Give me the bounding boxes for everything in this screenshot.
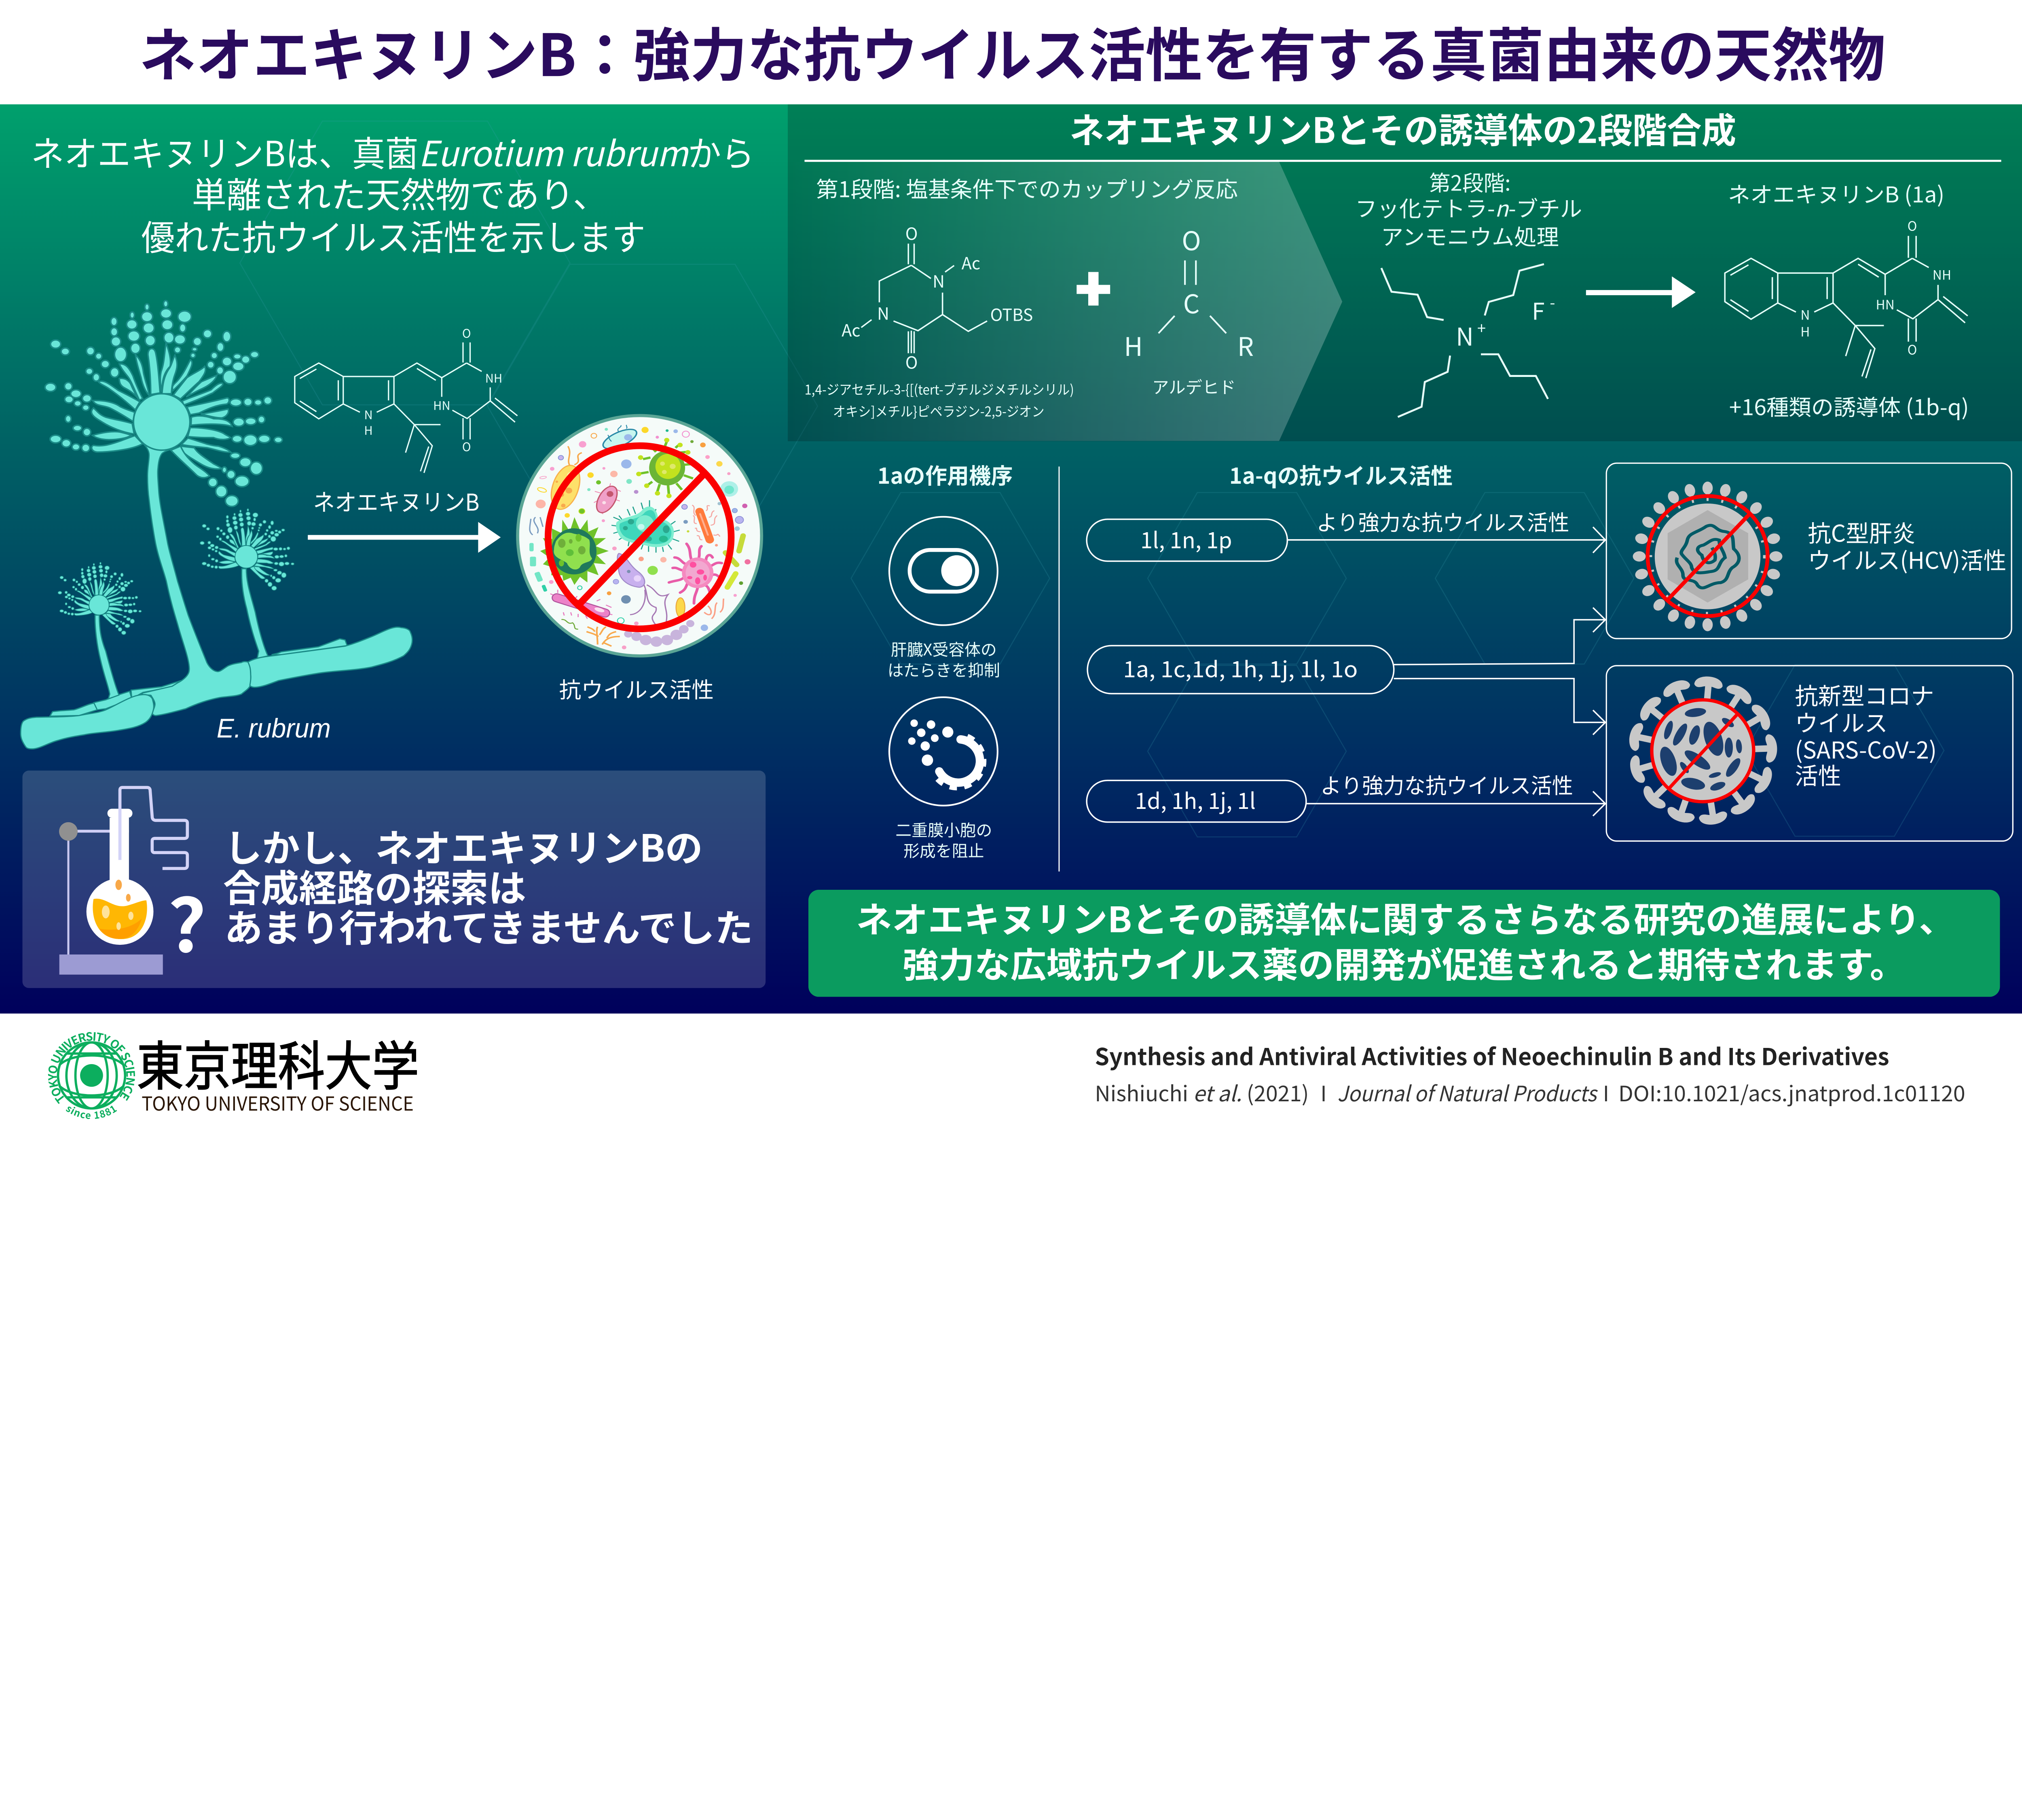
statement text (223, 818, 753, 952)
microbe: magenta rod (550, 590, 612, 619)
icon: coronavirus (1627, 675, 1778, 826)
panel: mechanism and antiviral activity (788, 441, 2022, 890)
microbe: purple bacillus (618, 554, 668, 625)
molecule: TBAF: + (1477, 317, 1486, 339)
molecule: piperazinedione (842, 220, 1033, 374)
molecule: neoechinulin B product: N (1801, 305, 1810, 324)
microbe: pink cell (592, 483, 621, 516)
plus sign (1077, 272, 1110, 306)
pill: 1l 1n 1p (1087, 519, 1288, 561)
citation (1095, 1038, 1965, 1108)
logo: university name: TOKYO UNIVERSITY OF SCIENCE (142, 1088, 414, 1116)
molecule: neoechinulin B product: O (1908, 216, 1917, 235)
icon: toggle receptor (889, 516, 998, 625)
molecule: aldehyde: H (1124, 326, 1143, 364)
derivatives label: +16種類の誘導体 (1b-q) (1729, 390, 1969, 422)
heading: mechanism: 1aの作用機序 (878, 458, 1013, 490)
illustration: microbes with prohibition sign (518, 416, 761, 656)
molecule: neoechinulin B product: O (1908, 340, 1917, 359)
intro text: ネオエキヌリンBは、真菌Eurotium rubrumから (31, 126, 754, 176)
label: DMV formation: 二重膜小胞の (896, 817, 992, 840)
label: anti-HCV: 抗C型肝炎 (1808, 514, 1916, 548)
label: DMV formation (896, 817, 992, 861)
icon: double-membrane vesicle gear (889, 697, 998, 805)
label: anti-HCV (1808, 514, 2007, 576)
label: LXR inhibition: 肝臓X受容体の (891, 637, 997, 660)
label: anti-SARS-CoV-2 (1795, 677, 1937, 791)
infographic canvas (0, 0, 2022, 1137)
label: anti-SARS-CoV-2: 活性 (1795, 757, 1842, 791)
icon: flask apparatus (59, 787, 187, 974)
panel: conclusion: 強力な広域抗ウイルス薬の開発が促進されると期待されます。 (903, 937, 1906, 988)
statement text: 合成経路の探索は (223, 858, 526, 912)
divider: mechanism / activity (1059, 466, 1060, 871)
step 2 label: フッ化テトラ-n-ブチル (1355, 191, 1582, 223)
microbe: teal germ (611, 500, 680, 553)
arrow: neoechinulin to activity (308, 522, 501, 553)
molecule: piperazinedione: N (933, 268, 945, 292)
molecule: neoechinulin B product (1725, 216, 1968, 378)
molecule: TBAF: - (1550, 291, 1555, 313)
molecule: TBAF: F (1532, 293, 1545, 327)
logo: university seal: since 1881 (64, 1101, 119, 1122)
background hexagon pattern (0, 104, 2022, 1014)
icon: HCV virus (1633, 481, 1783, 631)
intro text: 優れた抗ウイルス活性を示します (141, 210, 645, 260)
molecule: piperazinedione: OTBS (990, 302, 1033, 326)
label: LXR inhibition: はたらきを抑制 (888, 658, 1000, 681)
citation: I (1603, 1077, 1609, 1108)
pill: 1a group (1087, 645, 1394, 694)
molecule: neoechinulin B left: HN (433, 397, 451, 414)
molecule: neoechinulin B left: O (462, 438, 471, 455)
intro text (31, 126, 754, 260)
label: reagent name: オキシ]メチル}ピペラジン-2,5-ジオン (833, 401, 1045, 421)
citation: Journal of Natural Products (1337, 1077, 1598, 1108)
molecule: piperazinedione: O (905, 220, 918, 245)
arrow: pill 2 to HCV (1394, 607, 1605, 665)
molecule: piperazinedione: Ac (962, 250, 980, 274)
footer (0, 1014, 2022, 1137)
statement text: あまり行われてきませんでした (224, 898, 753, 952)
arrow: pill 3 to SARS-CoV-2: より強力な抗ウイルス活性 (1320, 769, 1573, 800)
arrow: pill 3 to SARS-CoV-2 (1306, 769, 1605, 816)
molecule: piperazinedione: N (877, 301, 889, 325)
pill: 1l 1n 1p: 1l, 1n, 1p (1140, 523, 1232, 554)
molecule: neoechinulin B left: NH (485, 369, 502, 386)
pill: 1a group: 1a, 1c,1d, 1h, 1j, 1l, 1o (1123, 652, 1358, 684)
product label: ネオエキヌリンB (1a) (1728, 177, 1945, 209)
molecule: TBAF: N (1456, 318, 1474, 353)
molecule: piperazinedione: O (905, 349, 918, 374)
panel: synthesis gap statement (0, 770, 788, 1014)
label: anti-SARS-CoV-2: ウイルス (1795, 704, 1888, 738)
microbe: small organisms (529, 459, 743, 629)
microbe: spiky green (540, 517, 609, 585)
microbe: orange rod (692, 505, 720, 540)
microbe: green virus (636, 438, 693, 498)
title bar: ネオエキヌリンB：強力な抗ウイルス活性を有する真菌由来の天然物 (139, 9, 1885, 93)
label: reagent name (805, 379, 1074, 421)
panel: conclusion: ネオエキヌリンBとその誘導体に関するさらなる研究の進展により、 (856, 892, 1955, 942)
panel: left illustrations (0, 104, 788, 770)
step 2 label: アンモニウム処理 (1381, 220, 1559, 252)
label: reagent name: 1,4-ジアセチル-3-{[(tert-ブチルジメチルシリル) (805, 379, 1074, 399)
pill: 1d group: 1d, 1h, 1j, 1l (1135, 783, 1256, 815)
molecule: aldehyde: C (1183, 284, 1200, 321)
label: anti-SARS-CoV-2: 抗新型コロナ (1795, 677, 1934, 711)
logo: university name: 東京理科大学 (137, 1024, 419, 1100)
molecule: neoechinulin B left: N (364, 406, 373, 423)
molecule: neoechinulin B product: HN (1876, 295, 1895, 313)
label: E. rubrum: E. rubrum (217, 713, 331, 744)
label: aldehyde: アルデヒド (1152, 374, 1236, 398)
citation: I (1320, 1077, 1327, 1108)
molecule: aldehyde (1124, 221, 1254, 364)
microbe: beads (624, 620, 694, 647)
citation: DOI:10.1021/acs.jnatprod.1c01120 (1618, 1077, 1965, 1108)
label: neoechinulin B: ネオエキヌリンB (313, 484, 480, 518)
panel: HCV (1607, 463, 2011, 638)
microbe: pink sun (669, 544, 722, 603)
statement text: しかし、ネオエキヌリンBの (224, 818, 703, 872)
molecule: aldehyde: R (1237, 326, 1254, 364)
reaction arrow (1586, 277, 1696, 308)
label: anti-HCV: ウイルス(HCV)活性 (1808, 542, 2007, 576)
molecule: neoechinulin B left: O (462, 324, 471, 341)
label: anti-SARS-CoV-2: (SARS-CoV-2) (1795, 731, 1937, 765)
illustration: fungus E. rubrum (21, 301, 412, 749)
pill: 1d group (1087, 780, 1306, 822)
panel: synthesis content (788, 104, 2022, 441)
molecule: TBAF (1381, 264, 1555, 417)
arrow: pill 1 to HCV (1288, 506, 1605, 552)
label: LXR inhibition (888, 637, 1000, 681)
main gradient background (0, 104, 2022, 1014)
heading: activity: 1a-qの抗ウイルス活性 (1229, 458, 1453, 490)
molecule: neoechinulin B product: NH (1933, 265, 1951, 284)
citation: Synthesis and Antiviral Activities of Neoechinulin B and Its Derivatives (1095, 1038, 1889, 1072)
step 2 label: 第2段階: (1429, 167, 1511, 197)
microbe: yellow oval (546, 447, 585, 512)
question mark: ? (168, 868, 206, 973)
divider under heading (805, 160, 2001, 162)
panel: conclusion (788, 890, 2022, 1014)
citation: Nishiuchi et al. (2021) (1095, 1077, 1309, 1108)
intro text: 単離された天然物であり、 (192, 167, 608, 218)
microbe: blue ciliate (600, 425, 640, 453)
molecule: aldehyde: O (1182, 221, 1201, 258)
dots (537, 427, 751, 650)
panel: synthesis background (788, 104, 2022, 441)
molecule: neoechinulin B left: H (364, 421, 373, 438)
arrow: pill 2 to SARS-CoV-2 (1394, 678, 1605, 734)
microbe: coral (586, 627, 620, 646)
logo: university seal: TOKYO UNIVERSITY OF SCIENCE (44, 1028, 140, 1107)
molecule: neoechinulin B left (295, 324, 517, 473)
arrow: pill 1 to HCV: より強力な抗ウイルス活性 (1317, 506, 1569, 537)
panel: step 1 arrow shape (788, 162, 1343, 441)
step 1 label: 第1段階: 塩基条件下でのカップリング反応 (816, 172, 1238, 204)
label: DMV formation: 形成を阻止 (904, 838, 984, 861)
label: antiviral activity: 抗ウイルス活性 (559, 672, 714, 704)
step 2 label (1355, 167, 1582, 252)
panel: SARS-CoV-2 (1607, 665, 2013, 841)
molecule: piperazinedione: Ac (842, 317, 861, 341)
molecule: neoechinulin B product: H (1801, 322, 1810, 341)
